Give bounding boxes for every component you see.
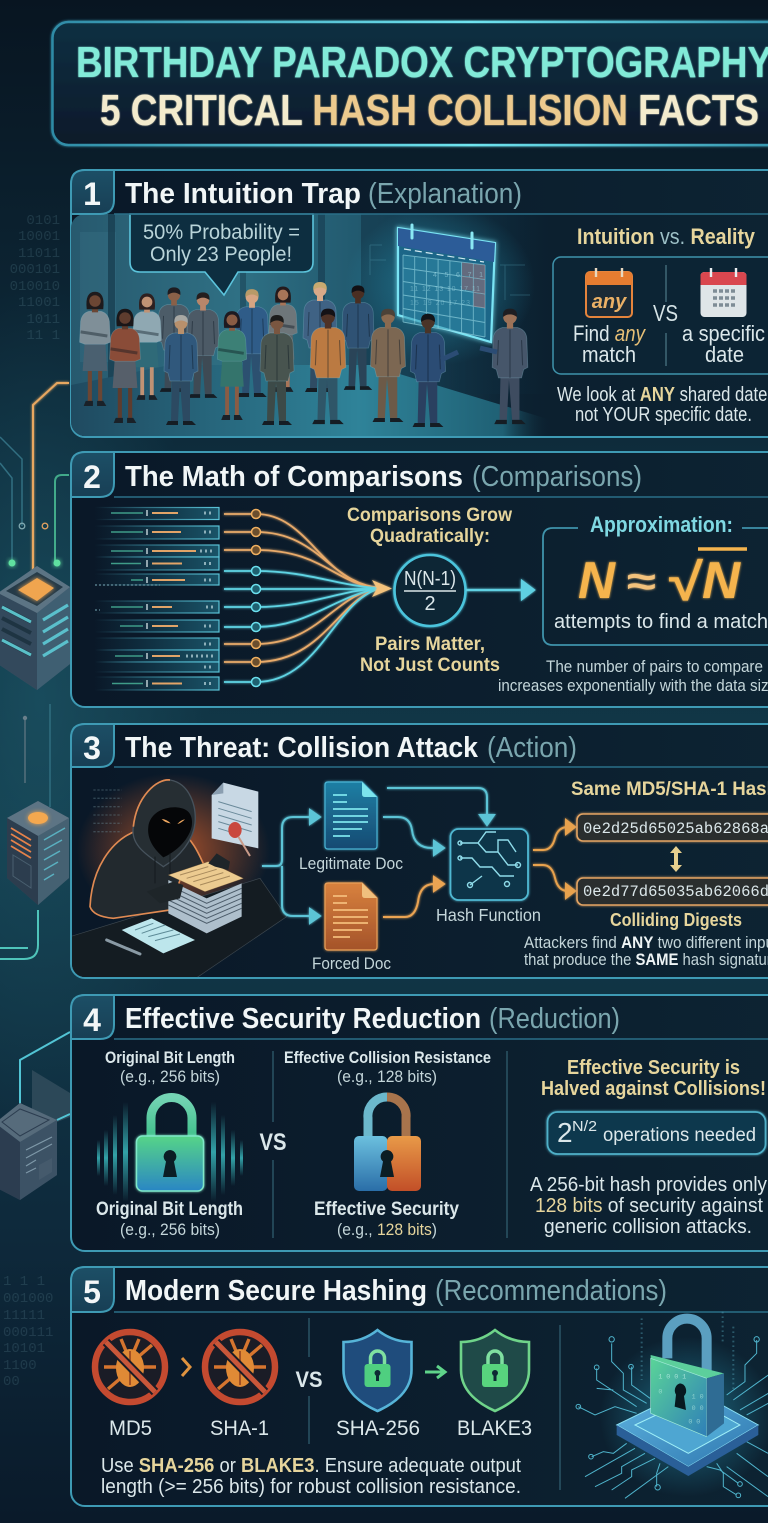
approximation box: N [702, 552, 741, 610]
header 1: The Intuition Trap [125, 178, 361, 210]
growth caption [347, 504, 513, 547]
node dots [252, 510, 260, 686]
digest chip 2 [577, 878, 768, 905]
header 4: (Reduction) [489, 1003, 620, 1035]
header 3 [71, 724, 768, 767]
callout bubble: Only 23 People! [150, 243, 292, 266]
binary decoration: upper left [10, 213, 60, 344]
arrow to approximation [466, 581, 534, 599]
pairs note [498, 657, 768, 695]
halved heading [541, 1057, 766, 1100]
binary decoration: upper left: 10001 [18, 229, 60, 245]
binary decoration: upper left: 11011 [18, 246, 60, 262]
growth caption: Quadratically: [370, 525, 490, 547]
icon: sha-256 shield [344, 1330, 412, 1411]
algorithm labels: MD5 [109, 1417, 152, 1440]
digest chip 1: 0e2d25d65025ab62868a [583, 820, 768, 838]
label: legitimate doc: Legitimate Doc [299, 854, 403, 873]
icon: green arrow [425, 1366, 445, 1378]
recommendation text: length (>= 256 bits) for robust collision resistance. [101, 1476, 521, 1498]
binary decoration: upper left: 11001 [18, 295, 60, 311]
original bit length top label: Original Bit Length [105, 1049, 235, 1067]
pairs caption [360, 633, 500, 676]
header 5 [71, 1267, 768, 1312]
header 3: (Action) [487, 732, 577, 764]
algorithm labels [109, 1417, 532, 1440]
growth caption: Comparisons Grow [347, 504, 513, 526]
server cube 2 [7, 801, 69, 905]
header 1: 1 [83, 176, 101, 212]
algorithm labels: SHA-256 [336, 1417, 420, 1440]
glowing calendar: 15 19 20 17 23 [410, 300, 470, 307]
crowd of people [80, 282, 528, 427]
icon: forced document [325, 883, 377, 950]
effective resistance top label [284, 1049, 491, 1086]
bit explanation: 128 bits of security against [535, 1194, 763, 1217]
effective security bottom label [314, 1199, 459, 1239]
original bit length bottom label: (e.g., 256 bits) [120, 1220, 220, 1239]
server panels behind [32, 1070, 70, 1127]
digest chip 2: 0e2d77d65035ab62066d [583, 883, 768, 901]
icon: any calendar: any [592, 291, 627, 313]
binary decoration: lower left: 1 1 1 [3, 1274, 45, 1290]
circuit connectors on left [0, 383, 70, 1113]
comparison box: Find any [573, 321, 647, 346]
pairs caption: Not Just Counts [360, 654, 500, 676]
header 3: 3 [83, 730, 101, 766]
digest chip 1 [577, 814, 768, 841]
converging arrowhead [372, 580, 392, 597]
shared date note [557, 384, 768, 426]
comparison box [553, 257, 768, 374]
operations pill [548, 1112, 766, 1154]
approximation box: Approximation: [590, 512, 733, 537]
icon: hash function box [450, 829, 528, 900]
attacker note [524, 934, 768, 969]
approximation box [543, 512, 768, 645]
approximation box: attempts to find a match [554, 610, 768, 633]
original bit length top label: (e.g., 256 bits) [120, 1068, 220, 1086]
header 2: 2 [83, 459, 101, 495]
binary decoration: upper left: 11 1 [26, 328, 60, 344]
operations pill: N/2 [572, 1118, 597, 1135]
header 1: (Explanation) [368, 178, 522, 210]
comparison box: match [582, 342, 636, 367]
pairs caption: Pairs Matter, [375, 633, 485, 655]
title panel [52, 22, 768, 145]
original bit length bottom label [96, 1199, 243, 1239]
header 3: The Threat: Collision Attack [125, 732, 479, 764]
binary decoration: upper left: 1011 [26, 312, 60, 328]
binary decoration: upper left: 010010 [10, 279, 60, 295]
approximation box: ≈ [627, 560, 656, 604]
illustration: padlock on chip: 0 0 [692, 1404, 704, 1412]
effective security bottom label: Effective Security [314, 1199, 459, 1220]
algorithm labels: BLAKE3 [457, 1417, 532, 1440]
header 2: (Comparisons) [472, 461, 642, 493]
original bit length bottom label: Original Bit Length [96, 1199, 243, 1220]
illustration: padlock on chip: 1 0 [692, 1392, 704, 1400]
header 1 [71, 170, 768, 214]
approximation box: √ [669, 554, 704, 612]
illustration: padlock on chip [576, 1312, 768, 1498]
colliding digests label: Colliding Digests [610, 909, 742, 930]
panel 2: the math of comparisons [71, 452, 768, 707]
glowing calendar [398, 225, 495, 342]
formula circle: N(N-1) [404, 568, 456, 590]
icon: legitimate document [325, 782, 377, 849]
scene: crowd in a room [71, 205, 551, 436]
label: forced doc: Forced Doc [312, 954, 391, 973]
original bit length top label [105, 1049, 235, 1086]
intuition vs reality heading: Intuition vs. Reality [577, 224, 756, 249]
effective resistance top label: (e.g., 128 bits) [337, 1068, 437, 1086]
binary decoration: lower left [3, 1274, 53, 1390]
effective resistance top label: Effective Collision Resistance [284, 1049, 491, 1067]
header 4: Effective Security Reduction [125, 1003, 481, 1035]
icon: broken md5 [95, 1332, 165, 1402]
operations pill: operations needed [603, 1125, 756, 1146]
operations pill: 2 [557, 1117, 573, 1148]
approximation box: N [578, 552, 616, 610]
converging lines [224, 514, 382, 682]
recommendation text [101, 1455, 521, 1498]
header 4: 4 [83, 1002, 101, 1038]
split arrows from attacker [262, 810, 320, 923]
callout bubble: 50% Probability = [143, 221, 300, 244]
vs label: VS [260, 1129, 286, 1156]
binary decoration: lower left: 1100 [3, 1358, 37, 1374]
server cube 3 [0, 1103, 70, 1200]
bit explanation: generic collision attacks. [544, 1215, 752, 1238]
comparison box: date [705, 342, 744, 367]
vs label: VS [296, 1367, 322, 1392]
effective security bottom label: (e.g., 128 bits) [337, 1220, 437, 1239]
arrows to digests [533, 820, 575, 898]
illustration: padlock on chip: 0 [658, 1387, 662, 1395]
panel 1: the intuition trap [71, 170, 768, 437]
panel 3: the threat [70, 724, 768, 980]
panel 5: modern secure hashing [71, 1267, 768, 1506]
header 4 [71, 995, 768, 1039]
header 2 [71, 452, 768, 497]
icon: any calendar [586, 268, 632, 317]
icon: chevron [182, 1358, 190, 1376]
formula circle: 2 [424, 593, 436, 615]
icon: halved lock [354, 1097, 421, 1191]
binary decoration: lower left: 001000 [3, 1291, 53, 1307]
glowing calendar: 11 12 13 10 17 11 [410, 286, 480, 293]
icon: broken sha-1 [205, 1332, 275, 1402]
binary decoration: upper left: 0101 [26, 213, 60, 229]
binary decoration: lower left: 000111 [3, 1325, 53, 1341]
binary decoration: upper left: 000101 [10, 262, 60, 278]
illustration: padlock on chip: 0 0 [688, 1417, 700, 1425]
header 5: Modern Secure Hashing [125, 1275, 427, 1307]
server cube 1 [0, 540, 70, 690]
icon: full strength lock [97, 1098, 243, 1202]
icon: specific date calendar [700, 268, 746, 317]
glowing calendar: 4 5 6 7 1 [433, 272, 483, 279]
label: hash function: Hash Function [436, 905, 541, 925]
left teal glow [0, 280, 210, 1120]
icon: blake3 shield [461, 1330, 529, 1411]
panel 4: security reduction [71, 995, 768, 1251]
halved heading: Effective Security is [567, 1057, 740, 1079]
icon: double arrow [670, 846, 682, 872]
data rows [95, 508, 219, 690]
comparison box: VS [653, 300, 678, 326]
arrows to hash function [383, 788, 494, 917]
illustration: hooded attacker at desk [70, 773, 287, 980]
recommendation text: Use SHA-256 or BLAKE3. Ensure adequate output [101, 1455, 521, 1477]
header 5: (Recommendations) [435, 1275, 667, 1307]
bit explanation [530, 1173, 768, 1238]
binary decoration: lower left: 10101 [3, 1341, 45, 1357]
illustration: padlock on chip: 1 0 0 1 [658, 1372, 686, 1380]
title line 2: 5 CRITICAL HASH COLLISION FACTS [100, 86, 759, 135]
binary decoration: lower left: 11111 [3, 1308, 45, 1324]
header 5: 5 [83, 1274, 101, 1310]
algorithm labels: SHA-1 [210, 1417, 269, 1440]
binary decoration: lower left: 00 [3, 1374, 20, 1390]
header 2: The Math of Comparisons [125, 461, 463, 493]
callout bubble [130, 214, 313, 295]
formula circle [394, 555, 466, 626]
